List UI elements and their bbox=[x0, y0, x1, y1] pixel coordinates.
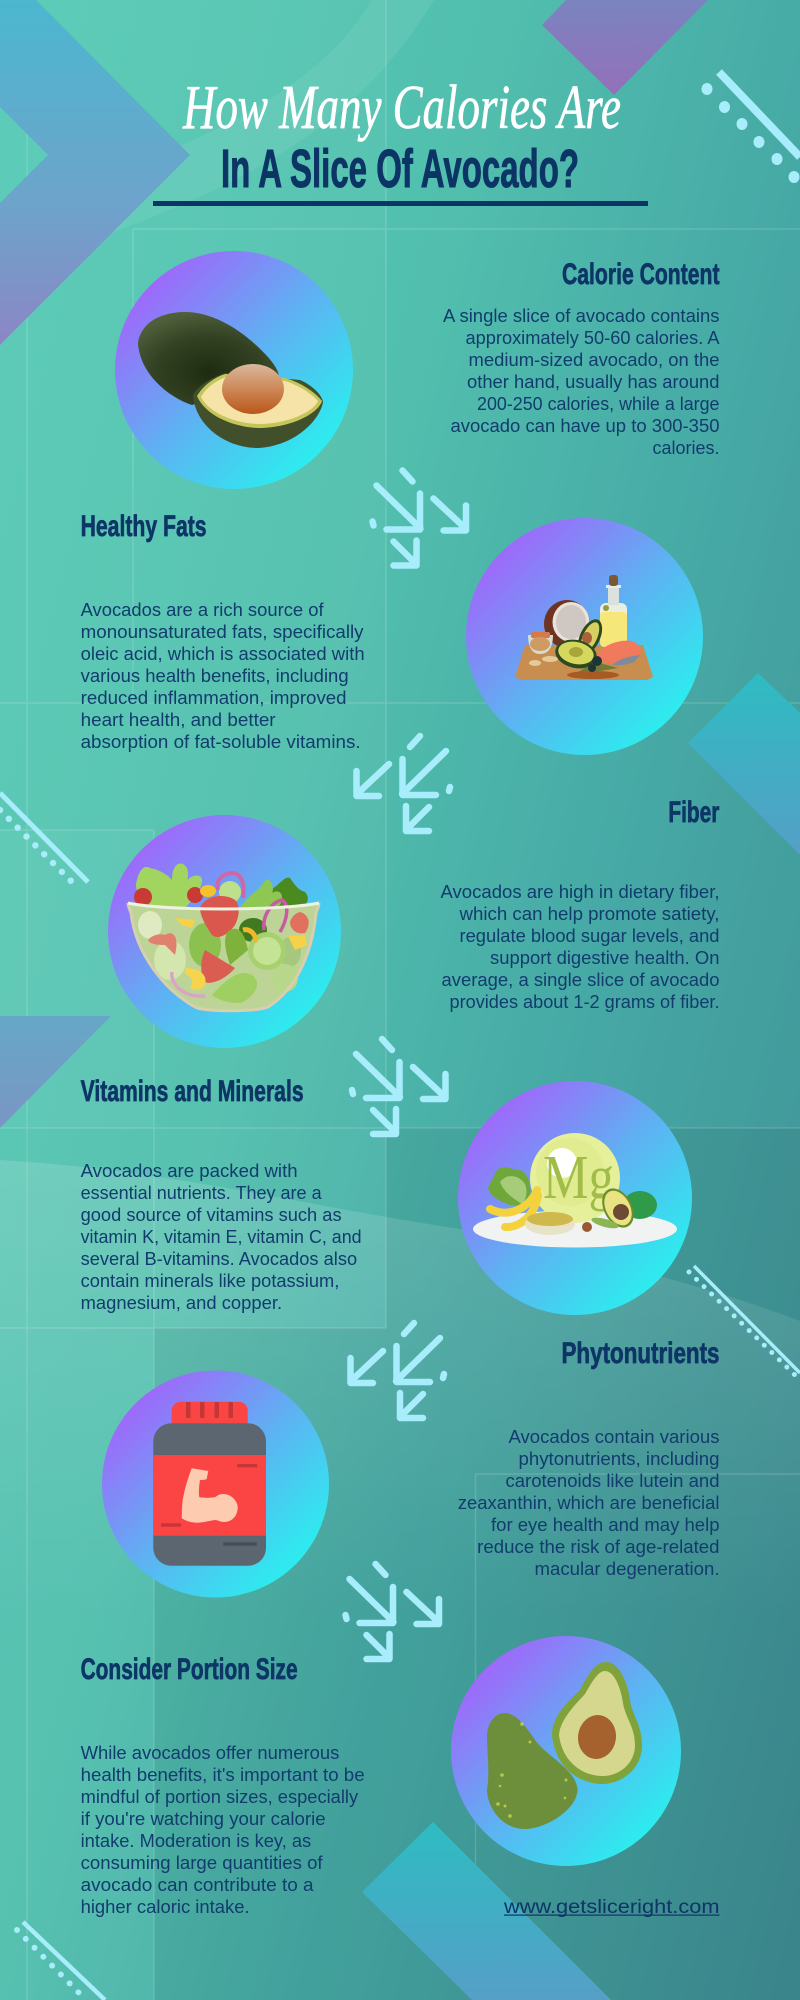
leaves bbox=[134, 864, 308, 915]
decorative diamond bottom bbox=[362, 1822, 611, 2000]
section: fiber bbox=[440, 796, 720, 1012]
decorative triangle left bbox=[0, 1016, 111, 1128]
bowl of seeds bbox=[525, 1213, 575, 1235]
body text: various health benefits, including bbox=[81, 665, 349, 686]
title bold line: In A Slice Of Avocado? bbox=[221, 139, 579, 199]
body text: reduced inflammation, improved bbox=[81, 687, 347, 708]
section: vitamins and minerals bbox=[81, 1075, 362, 1313]
avocado half flesh bbox=[197, 374, 322, 428]
icon: avocado photo in circle bbox=[115, 251, 353, 489]
body text: other hand, usually has around bbox=[467, 371, 720, 392]
decorative purple diamond top bbox=[542, 0, 708, 95]
dotted line accent top right bbox=[702, 72, 800, 183]
body text: avocado can have up to 300-350 bbox=[450, 415, 720, 436]
avocado pit bbox=[222, 364, 284, 414]
lettuce bbox=[488, 1167, 530, 1206]
icon: healthy fats food board in circle bbox=[466, 518, 703, 755]
body text: intake. Moderation is key, as bbox=[81, 1830, 311, 1851]
bowl rim bbox=[128, 903, 319, 1011]
body text: Avocados are packed with bbox=[81, 1160, 298, 1181]
section: healthy fats bbox=[81, 510, 365, 752]
body text: 200-250 calories, while a large bbox=[477, 393, 720, 414]
section: phytonutrients bbox=[458, 1337, 720, 1579]
cutting board bbox=[515, 645, 653, 680]
body text: vitamin K, vitamin E, vitamin C, and bbox=[81, 1226, 362, 1247]
title script line: How Many Calories Are bbox=[182, 74, 621, 142]
arrows 4 down-left bbox=[350, 1323, 444, 1418]
body text: if you're watching your calorie bbox=[81, 1808, 326, 1829]
body text bbox=[443, 305, 720, 458]
jar cap bbox=[172, 1402, 248, 1432]
arrows 2 down-left bbox=[356, 736, 450, 831]
icon: supplement jar in circle bbox=[102, 1370, 329, 1598]
body text bbox=[458, 1426, 720, 1579]
body text: avocado can contribute to a bbox=[81, 1874, 314, 1895]
body text: medium-sized avocado, on the bbox=[468, 349, 720, 370]
section: calorie content bbox=[443, 258, 720, 458]
salmon bbox=[596, 641, 641, 665]
body text bbox=[440, 881, 720, 1012]
body text: average, a single slice of avocado bbox=[442, 969, 720, 990]
pea pod and nut bbox=[590, 1216, 620, 1230]
body text: zeaxanthin, which are beneficial bbox=[458, 1492, 720, 1513]
heading: Fiber bbox=[668, 796, 720, 829]
body text: regulate blood sugar levels, and bbox=[460, 925, 720, 946]
body text: monounsaturated fats, specifically bbox=[81, 621, 364, 642]
body text bbox=[81, 1742, 365, 1917]
body text: Avocados contain various bbox=[508, 1426, 720, 1447]
icon: salad bowl in circle bbox=[108, 815, 341, 1048]
body text: macular degeneration. bbox=[534, 1558, 720, 1579]
decorative chevron top left bbox=[0, 0, 190, 345]
body text: heart health, and better bbox=[81, 709, 276, 730]
heading: Vitamins and Minerals bbox=[81, 1075, 304, 1108]
avocado half skin bbox=[193, 373, 323, 448]
arrows 5 down-right bbox=[346, 1564, 439, 1659]
body text: reduce the risk of age-related bbox=[477, 1536, 720, 1557]
plate bbox=[473, 1210, 677, 1248]
body text: support digestive health. On bbox=[490, 947, 720, 968]
coconut bbox=[544, 600, 590, 648]
dotted line accent right bbox=[689, 1266, 800, 1378]
heading: Phytonutrients bbox=[562, 1337, 720, 1370]
decorative diamond right bbox=[688, 673, 800, 855]
body text: Avocados are a rich source of bbox=[81, 599, 324, 620]
body text: contain minerals like potassium, bbox=[81, 1270, 339, 1291]
avocados bbox=[573, 616, 607, 658]
bananas bbox=[490, 1190, 538, 1227]
section: consider portion size bbox=[81, 1653, 365, 1917]
title underline bbox=[153, 201, 648, 206]
oil bottle bbox=[600, 575, 627, 647]
body text: mindful of portion sizes, especially bbox=[81, 1786, 359, 1807]
icon: magnesium foods in circle bbox=[458, 1081, 692, 1315]
whole avocado bbox=[487, 1713, 578, 1829]
jar label bbox=[153, 1455, 266, 1536]
body text: provides about 1-2 grams of fiber. bbox=[450, 991, 720, 1012]
body text: carotenoids like lutein and bbox=[506, 1470, 720, 1491]
body text: magnesium, and copper. bbox=[81, 1292, 282, 1313]
icon: magnesium foods in circle: Mg bbox=[543, 1144, 614, 1212]
body text: higher caloric intake. bbox=[81, 1896, 250, 1917]
body text: oleic acid, which is associated with bbox=[81, 643, 365, 664]
body text: consuming large quantities of bbox=[81, 1852, 323, 1873]
body text: health benefits, it's important to be bbox=[81, 1764, 365, 1785]
icon: avocado illustration in circle bbox=[451, 1636, 681, 1866]
website link: www.getsliceright.com bbox=[503, 1896, 720, 1918]
salad contents bbox=[138, 896, 309, 1003]
body text bbox=[81, 1160, 362, 1313]
arrows 3 down-right bbox=[352, 1039, 446, 1134]
arrows 1 down-right bbox=[372, 470, 466, 566]
flexed arm bbox=[182, 1468, 238, 1523]
herbs and olives bbox=[578, 662, 618, 672]
avocado bbox=[623, 1191, 657, 1219]
avocado half bbox=[552, 1662, 642, 1784]
glass of nuts bbox=[528, 635, 553, 654]
body text: approximately 50-60 calories. A bbox=[466, 327, 720, 348]
body text: Avocados are high in dietary fiber, bbox=[440, 881, 720, 902]
bowl bbox=[128, 903, 319, 1011]
body text: for eye health and may help bbox=[491, 1514, 720, 1535]
whole avocado bbox=[138, 312, 279, 405]
dotted line accent bottom left bbox=[17, 1922, 105, 2000]
heading: Calorie Content bbox=[562, 258, 720, 291]
body text: which can help promote satiety, bbox=[458, 903, 720, 924]
jar body bbox=[153, 1423, 266, 1566]
body text: A single slice of avocado contains bbox=[443, 305, 720, 326]
body text: good source of vitamins such as bbox=[81, 1204, 342, 1225]
body text: several B-vitamins. Avocados also bbox=[81, 1248, 357, 1269]
heading: Healthy Fats bbox=[81, 510, 207, 543]
body text: absorption of fat-soluble vitamins. bbox=[81, 731, 361, 752]
magnesium sphere bbox=[530, 1133, 620, 1223]
body text: calories. bbox=[652, 437, 720, 458]
body text: essential nutrients. They are a bbox=[81, 1182, 322, 1203]
body text: While avocados offer numerous bbox=[81, 1742, 339, 1763]
heading: Consider Portion Size bbox=[81, 1653, 298, 1686]
body text bbox=[81, 599, 365, 752]
dotted line accent left bbox=[0, 793, 88, 889]
title bbox=[153, 74, 648, 206]
body text: phytonutrients, including bbox=[518, 1448, 720, 1469]
